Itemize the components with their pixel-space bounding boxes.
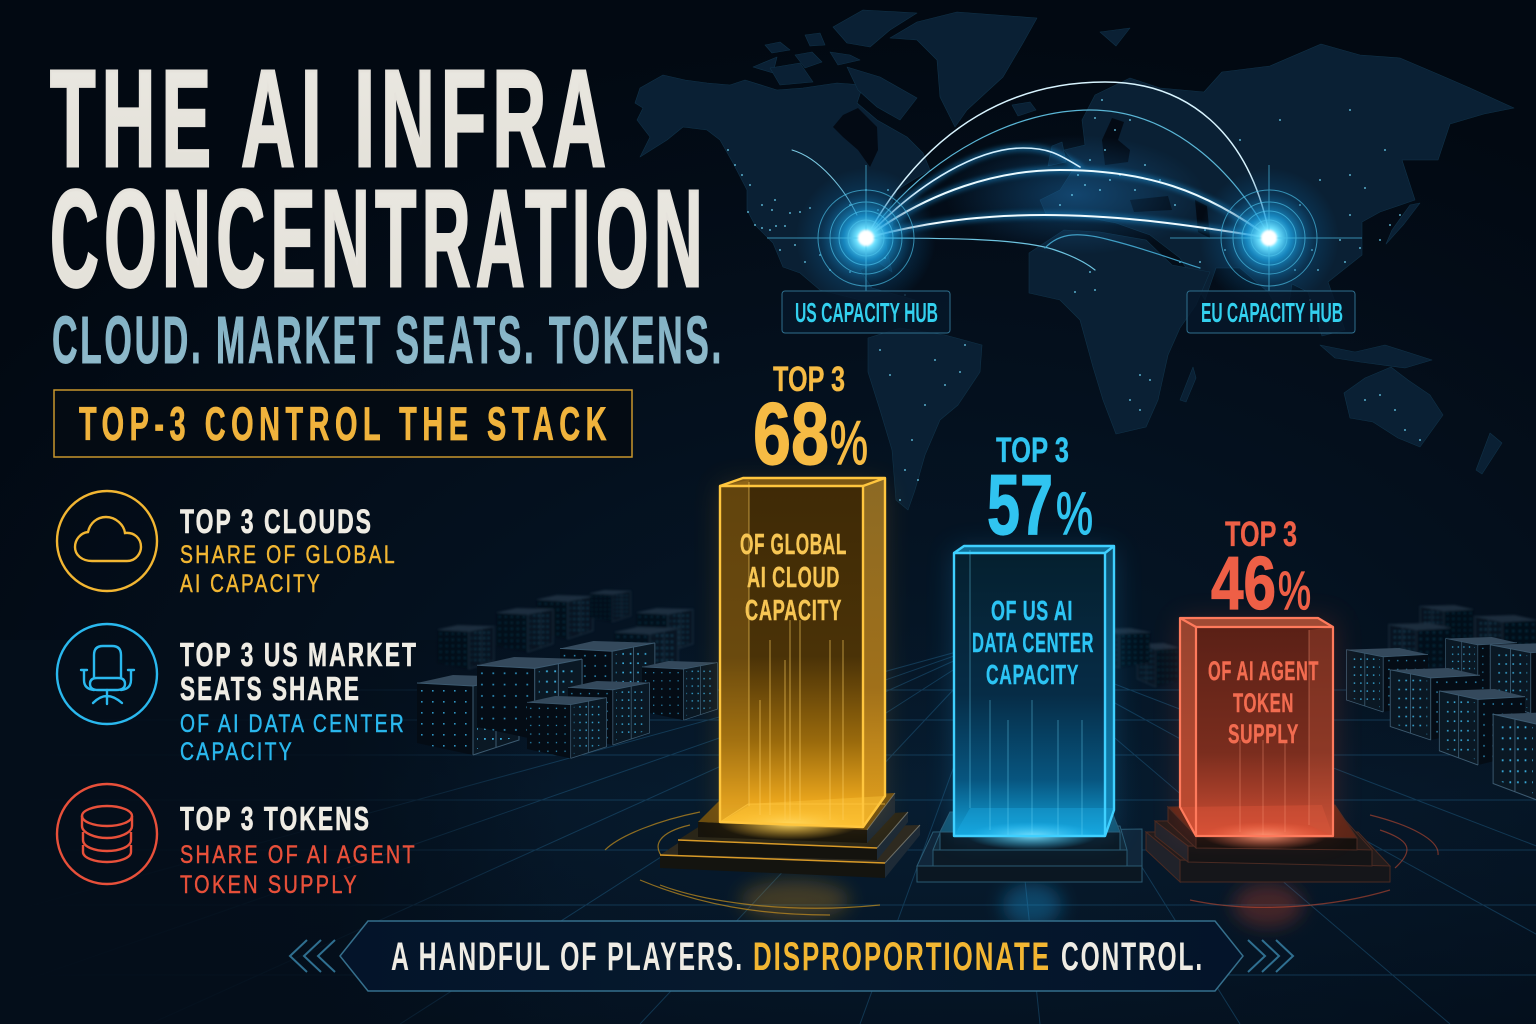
label: red 46%: % [1278, 561, 1311, 621]
title: THE AI INFRA [50, 42, 612, 196]
arc: highest [866, 82, 1270, 238]
icon: chair [57, 624, 157, 724]
list item: tokens [57, 784, 417, 899]
bar glow [722, 486, 882, 821]
list item: tokens: SHARE OF AI AGENT [180, 841, 417, 869]
bar: blue 57% [954, 546, 1114, 850]
arrows: left chevrons [290, 940, 335, 972]
label: yellow 68%: % [830, 409, 868, 478]
map: Arctic islands [765, 33, 860, 68]
bar: red 46%: SUPPLY [1228, 719, 1299, 749]
map: North America [635, 75, 930, 318]
icon: cloud [57, 491, 157, 591]
label: yellow 68%: TOP 3 [773, 360, 845, 399]
bar glow [1180, 620, 1335, 835]
map: British Isles [1048, 142, 1066, 166]
subtitle: CLOUD. MARKET SEATS. TOKENS. [52, 303, 724, 378]
label: yellow 68% [753, 360, 868, 483]
bar: yellow 68% [720, 478, 885, 840]
map: Africa [1029, 230, 1210, 434]
label: US capacity hub [782, 291, 950, 333]
label: red 46% [1211, 515, 1311, 625]
map: Greenland [890, 12, 1037, 127]
arc: Alaska [792, 150, 857, 215]
map: Hudson Bay [833, 108, 878, 167]
label: yellow 68%: 68 [753, 384, 829, 483]
arc glow [866, 148, 1270, 238]
arc: fourth [866, 170, 1270, 238]
list item: clouds: AI CAPACITY [180, 570, 322, 598]
banner: DISPROPORTIONATE [753, 935, 1051, 979]
icon: token stack [57, 784, 157, 884]
US hub [767, 165, 936, 308]
label: EU capacity hub: EU CAPACITY HUB [1201, 297, 1343, 328]
map: Iceland [1012, 102, 1036, 116]
label: blue 57%: TOP 3 [996, 431, 1069, 470]
text: CONCENTRATION [50, 162, 708, 316]
arc: low [866, 238, 1095, 270]
banner: CONTROL. [1061, 935, 1204, 979]
arc: third [866, 148, 1080, 238]
arc: second [866, 110, 1270, 238]
bar: yellow 68%: CAPACITY [745, 595, 842, 627]
bar: yellow 68%: OF GLOBAL [740, 529, 847, 561]
list item: US market seats [57, 624, 418, 766]
bar: red 46%: TOKEN [1233, 688, 1294, 718]
label: red 46%: 46 [1211, 541, 1276, 625]
data center servers, right [1094, 605, 1536, 800]
map: New Zealand [1476, 433, 1502, 474]
banner [340, 921, 1243, 991]
list item: clouds: SHARE OF GLOBAL [180, 541, 397, 569]
arrows: right chevrons [1248, 940, 1293, 972]
bar: blue 57%: DATA CENTER [972, 627, 1094, 658]
map: Black sea [1130, 196, 1172, 212]
city lights [728, 100, 1420, 500]
map: Baltic sea [1102, 118, 1130, 165]
title [50, 42, 708, 316]
list item: US market seats: TOP 3 US MARKET [180, 636, 418, 673]
pedestal: yellow [660, 793, 920, 878]
list item: clouds: TOP 3 CLOUDS [180, 503, 373, 541]
bar: red 46%: OF AI AGENT [1208, 656, 1319, 686]
label: EU capacity hub [1187, 291, 1355, 333]
callout: top-3 control the stack: TOP-3 CONTROL THE STACK [79, 397, 612, 450]
bar: blue 57%: CAPACITY [986, 659, 1079, 690]
pedestal: red [1146, 805, 1390, 882]
map: Victoria Island [770, 63, 813, 85]
callout: top-3 control the stack [54, 390, 632, 457]
list item: US market seats: OF AI DATA CENTER [180, 710, 406, 738]
arc: Africa [1045, 235, 1200, 268]
map: Eurasia [1040, 44, 1514, 336]
label: blue 57%: 57 [987, 458, 1053, 553]
list item: tokens: TOKEN SUPPLY [180, 871, 359, 899]
map: Ellesmere Island [833, 10, 917, 47]
label: blue 57%: % [1056, 480, 1093, 547]
banner: A HANDFUL OF PLAYERS. [391, 935, 744, 979]
map: Indonesia [1320, 345, 1432, 368]
list item: tokens: TOP 3 TOKENS [180, 800, 371, 837]
map: Svalbard [1100, 28, 1130, 46]
arc: fifth [866, 215, 1270, 238]
list item: US market seats: SEATS SHARE [180, 670, 361, 707]
world map [635, 10, 1514, 510]
map glow around Europe [945, 135, 1205, 255]
floor grid [0, 640, 1536, 1024]
bar: blue 57%: OF US AI [991, 595, 1073, 626]
floor reflections [740, 880, 1303, 927]
list item: US market seats: CAPACITY [180, 738, 294, 766]
label: blue 57% [987, 431, 1093, 553]
label: US capacity hub: US CAPACITY HUB [795, 297, 938, 328]
map: South America [868, 328, 982, 510]
bar: red 46% [1180, 618, 1335, 850]
data center servers, left [417, 590, 717, 758]
connection arcs [792, 82, 1270, 270]
map: Madagascar [1180, 367, 1196, 402]
EU hub [1170, 165, 1362, 308]
map: Baffin Island [847, 67, 917, 120]
map: Australia [1344, 367, 1443, 447]
dividers [157, 615, 470, 617]
map: Banks Island [753, 57, 777, 73]
bar: yellow 68%: AI CLOUD [747, 562, 840, 594]
map: Caspian sea [1195, 200, 1210, 238]
label: red 46%: TOP 3 [1225, 515, 1297, 554]
map: Japan [1386, 203, 1420, 244]
pedestal: blue [917, 812, 1142, 882]
bar glow [954, 550, 1114, 835]
list item: clouds [57, 491, 397, 598]
floor rings [605, 812, 1438, 915]
